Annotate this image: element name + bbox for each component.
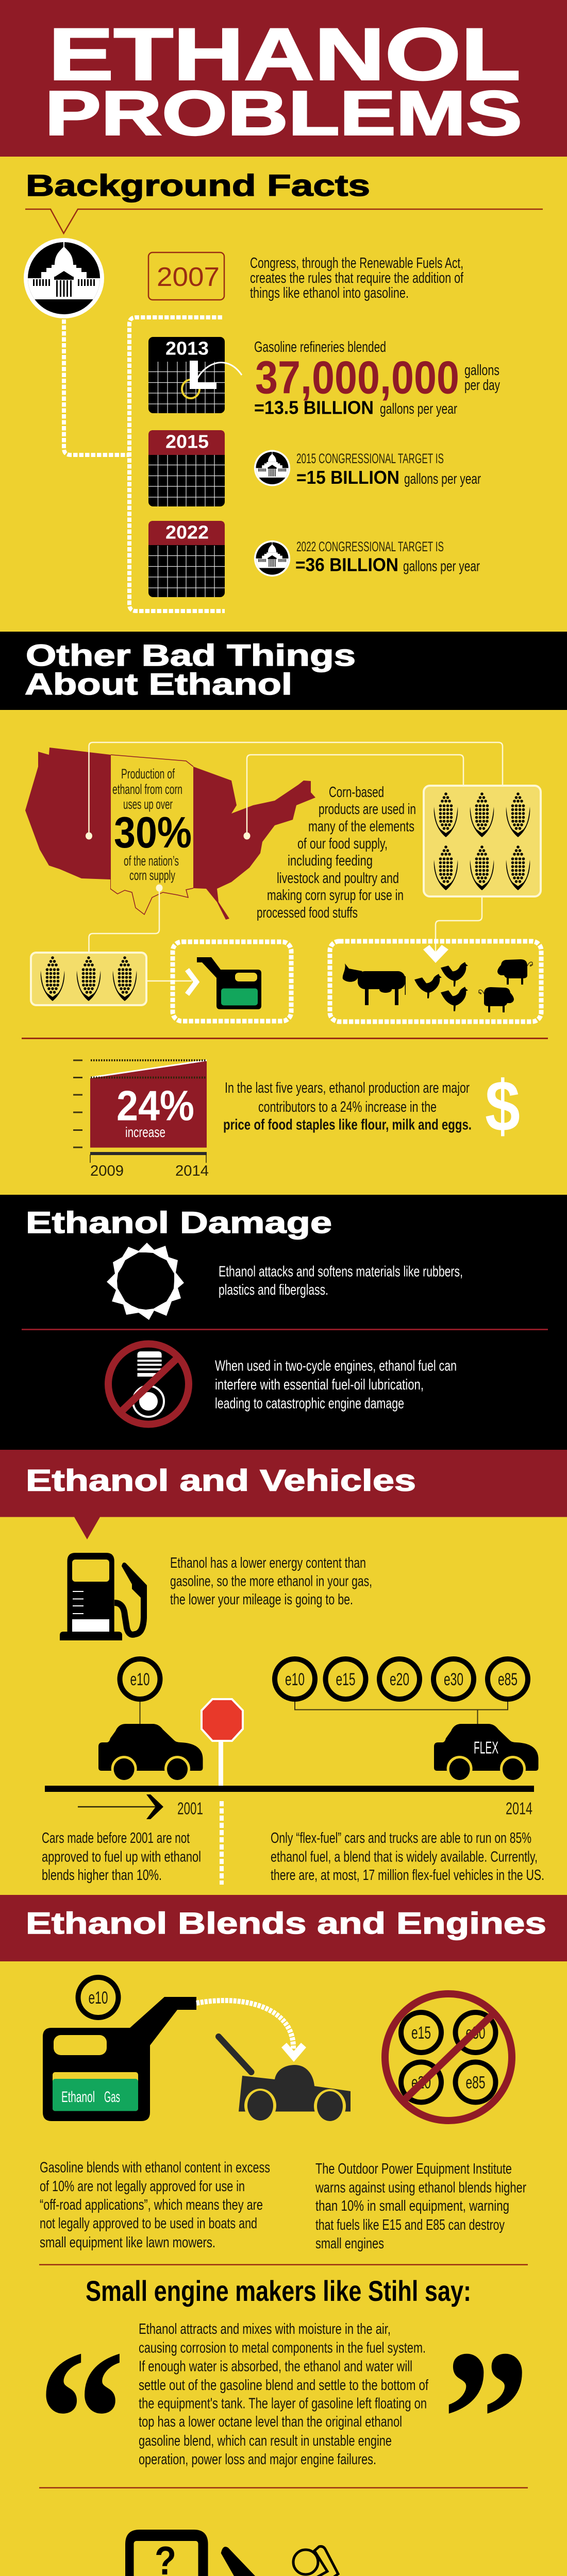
icon: car pre 2001 bbox=[98, 1724, 203, 1782]
divider bbox=[39, 2487, 528, 2488]
heading: small engine makers: Small engine makers like Stihl say: bbox=[86, 2275, 471, 2307]
blend badges: flex fuel bbox=[275, 1659, 528, 1699]
icon: prohibited blends: e20 bbox=[411, 2073, 431, 2093]
calendar 2013 bbox=[148, 337, 242, 413]
text: off road applications bbox=[40, 2160, 270, 2251]
icon: torn rubber ring bbox=[107, 1243, 184, 1320]
quote: stihl: If enough water is absorbed, the ethanol and water will bbox=[139, 2359, 412, 2375]
heading: ethanol damage: Ethanol Damage bbox=[26, 1206, 332, 1240]
heading: other bad things: Other Bad Things bbox=[26, 639, 356, 672]
text: outdoor power equipment institute: than 10% in small equipment, warning bbox=[315, 2198, 509, 2214]
quote: stihl: settle out of the gasoline blend and settle to the bottom of bbox=[139, 2377, 429, 2394]
icon: prohibited blends: e85 bbox=[466, 2073, 486, 2093]
chart: 24 percent increase: 24% bbox=[116, 1082, 194, 1129]
quote: stihl: causing corrosion to metal components in the fuel system. bbox=[139, 2340, 426, 2357]
blend badge: e10 bbox=[78, 1977, 119, 2018]
arrow: corn to fuel bbox=[187, 970, 196, 994]
blend badges: flex fuel: e30 bbox=[444, 1670, 463, 1689]
text: renewable fuels act: creates the rules that require the addition of bbox=[250, 270, 464, 286]
dashed box: livestock bbox=[330, 941, 541, 1022]
text: renewable fuels act bbox=[250, 255, 464, 301]
text: cars before 2001 bbox=[42, 1830, 201, 1884]
divider bbox=[22, 1038, 548, 1039]
icon: pigs bbox=[478, 959, 533, 1012]
icon: prohibited blends: e15 bbox=[411, 2023, 431, 2043]
text: flex fuel cars bbox=[271, 1830, 544, 1884]
icon: flex fuel car: FLEX bbox=[474, 1738, 498, 1757]
year labels: 2001 bbox=[177, 1799, 203, 1818]
text: lower energy content: Ethanol has a lower energy content than bbox=[170, 1555, 366, 1571]
stat: 37 million gallons per day: gallons bbox=[464, 362, 499, 379]
text: 30 percent of corn supply: ethanol from corn bbox=[112, 782, 182, 797]
stat: 2022 target: 2022 CONGRESSIONAL TARGET IS bbox=[296, 539, 444, 554]
icon: prohibited piston bbox=[108, 1344, 189, 1424]
chart: 24 percent increase: increase bbox=[125, 1124, 165, 1140]
panel: ethanol blends and engines bbox=[0, 1895, 567, 2576]
blend badges: flex fuel: e85 bbox=[498, 1670, 518, 1689]
heading band: blends and engines: Ethanol Blends and Engines bbox=[26, 1907, 546, 1940]
text: 30 percent of corn supply: uses up over bbox=[123, 796, 173, 812]
divider bbox=[22, 1329, 548, 1330]
text: off road applications: Gasoline blends with ethanol content in excess bbox=[40, 2160, 270, 2176]
text: lower energy content: the lower your mileage is going to be. bbox=[170, 1591, 353, 1608]
stat: 2022 target bbox=[295, 539, 480, 575]
quote: stihl: operation, power loss and major engine failures. bbox=[139, 2451, 376, 2468]
text: cars before 2001: blends higher than 10%. bbox=[42, 1867, 162, 1884]
arrow: corn to livestock bbox=[423, 945, 448, 963]
text: cars before 2001: approved to fuel up with ethanol bbox=[42, 1849, 201, 1865]
text: corn based products: many of the elements bbox=[308, 818, 414, 835]
quote: stihl: gasoline blend, which can result in unstable engine bbox=[139, 2433, 392, 2449]
quote: stihl: the equipment's tank. The layer of gasoline left floating on bbox=[139, 2396, 427, 2412]
title bbox=[45, 13, 522, 148]
icon: capitol bbox=[24, 238, 104, 318]
blend badges: flex fuel: e20 bbox=[390, 1670, 409, 1689]
text: off road applications: of 10% are not legally approved for use in bbox=[40, 2178, 245, 2195]
stat: 2015 target: gallons per year bbox=[404, 471, 481, 487]
icon: capitol small 2015 bbox=[254, 450, 290, 486]
blend badges: flex fuel: e10 bbox=[285, 1670, 305, 1689]
quote: stihl bbox=[139, 2321, 429, 2468]
panel: background facts bbox=[24, 169, 543, 611]
panel: ethanol and vehicles bbox=[0, 1450, 567, 1885]
blend badge: e10: e10 bbox=[89, 1988, 108, 2008]
stat: 37 million gallons per day: Gasoline refineries blended bbox=[254, 339, 386, 355]
icon: prohibited blends: e30 bbox=[466, 2023, 486, 2043]
icon box: three corn cobs bbox=[31, 953, 146, 1005]
text: food staples bbox=[223, 1080, 472, 1133]
heading band: ethanol and vehicles bbox=[0, 1450, 567, 1539]
icon: dollar sign: $ bbox=[485, 1065, 520, 1146]
connector lines to cars bbox=[140, 1702, 508, 1736]
heading: background facts: Background Facts bbox=[26, 169, 370, 202]
stat: 37 million gallons per day: 37,000,000 bbox=[255, 352, 459, 404]
text: attacks materials bbox=[219, 1263, 463, 1298]
title: ETHANOL bbox=[48, 13, 521, 96]
callout pointer line bbox=[25, 209, 543, 233]
quote: stihl: Ethanol attracts and mixes with moisture in the air, bbox=[139, 2321, 391, 2337]
icon: confusing fuel pump bbox=[112, 2530, 265, 2576]
text: attacks materials: plastics and fiberglass. bbox=[219, 1282, 328, 1298]
dashed box: fuel can bbox=[173, 942, 291, 1021]
text: two cycle engines: When used in two-cycle engines, ethanol fuel can bbox=[215, 1358, 457, 1375]
text: corn based products: processed food stuffs bbox=[257, 905, 358, 921]
icon: prohibited blends bbox=[385, 1994, 512, 2121]
text: lower energy content: gasoline, so the more ethanol in your gas, bbox=[170, 1573, 372, 1590]
icon: large fuel can: Ethanol bbox=[61, 2089, 95, 2106]
calendar 2015: 2015 bbox=[165, 431, 209, 452]
text: outdoor power equipment institute: that fuels like E15 and E85 can destroy bbox=[315, 2217, 505, 2233]
text: attacks materials: Ethanol attacks and softens materials like rubbers, bbox=[219, 1263, 463, 1280]
text: lower energy content bbox=[170, 1555, 372, 1608]
stat: 37 million gallons per day: =13.5 BILLION bbox=[254, 397, 374, 418]
text: renewable fuels act: things like ethanol into gasoline. bbox=[250, 285, 409, 301]
quote mark: open: “ bbox=[38, 2310, 125, 2529]
road timeline bbox=[45, 1786, 534, 1792]
text: off road applications: not legally approved to be used in boats and bbox=[40, 2215, 257, 2232]
text: corn based products: making corn syrup for use in bbox=[267, 887, 404, 904]
year labels bbox=[177, 1799, 532, 1818]
text: renewable fuels act: Congress, through the Renewable Fuels Act, bbox=[250, 255, 463, 272]
text: cars before 2001: Cars made before 2001 are not bbox=[42, 1830, 190, 1846]
chart: 24 percent increase: 2009 bbox=[90, 1163, 124, 1179]
2007 year box bbox=[148, 252, 224, 300]
icon: flex fuel car bbox=[434, 1724, 538, 1782]
stat: 2015 target bbox=[296, 451, 481, 488]
text: food staples: price of food staples like flour, milk and eggs. bbox=[223, 1117, 472, 1133]
year labels: 2014 bbox=[506, 1799, 532, 1818]
stat: 37 million gallons per day: per day bbox=[464, 377, 500, 394]
stat: 37 million gallons per day bbox=[254, 339, 500, 418]
icon: fuel can bbox=[197, 957, 261, 1009]
stat: 2022 target: =36 BILLION bbox=[295, 554, 398, 575]
text: outdoor power equipment institute: small engines bbox=[315, 2235, 384, 2252]
stat: 37 million gallons per day: gallons per year bbox=[380, 401, 457, 417]
chart: 24 percent increase: 2014 bbox=[175, 1163, 209, 1179]
calendar 2022: 2022 bbox=[165, 521, 209, 543]
dashed divider bbox=[220, 1801, 224, 1885]
stat: 2015 target: 2015 CONGRESSIONAL TARGET IS bbox=[296, 451, 444, 466]
map: united states bbox=[25, 742, 315, 927]
icon: confused person bbox=[278, 2547, 338, 2576]
text: food staples: contributors to a 24% increase in the bbox=[258, 1099, 437, 1115]
icon: large fuel can bbox=[43, 1997, 196, 2121]
text: two cycle engines: leading to catastrophic engine damage bbox=[215, 1395, 404, 1412]
text: 30 percent of corn supply: 30% bbox=[114, 808, 192, 857]
text: 30 percent of corn supply: corn supply bbox=[129, 868, 175, 883]
2007 year box: 2007 bbox=[157, 262, 220, 292]
heading: other bad things: About Ethanol bbox=[25, 668, 292, 701]
text: outdoor power equipment institute bbox=[315, 2161, 526, 2252]
arrow: before 2001 bbox=[78, 1794, 163, 1819]
quote: stihl: top has a lower octane level than the original ethanol bbox=[139, 2414, 402, 2430]
blend badges: flex fuel: e15 bbox=[336, 1670, 356, 1689]
text: 30 percent of corn supply bbox=[112, 766, 192, 883]
text: corn based products: products are used in bbox=[319, 801, 416, 818]
icon box: six corn cobs bbox=[424, 786, 541, 896]
panel: header bbox=[0, 0, 567, 157]
icon: cow bbox=[343, 963, 406, 1005]
text: corn based products: of our food supply, bbox=[297, 836, 388, 852]
text: corn based products: livestock and poultry and bbox=[277, 870, 399, 887]
text: 30 percent of corn supply: Production of bbox=[121, 766, 175, 782]
quote mark: close: ” bbox=[442, 2310, 530, 2529]
stat: 2022 target: gallons per year bbox=[403, 558, 480, 575]
arrow: dashed pour bbox=[196, 2001, 306, 2062]
dashed timeline connector bbox=[64, 317, 225, 611]
panel: food price increase bbox=[73, 1060, 520, 1179]
text: corn based products: Corn-based bbox=[329, 784, 384, 801]
calendar 2015 bbox=[148, 430, 225, 506]
text: two cycle engines bbox=[215, 1358, 457, 1412]
icon: chickens bbox=[414, 962, 468, 1011]
heading: other bad things bbox=[25, 639, 356, 701]
white connector lines bbox=[86, 742, 503, 981]
panel: other bad things bbox=[0, 632, 567, 1022]
text: off road applications: small equipment like lawn mowers. bbox=[40, 2234, 215, 2251]
heading band: ethanol and vehicles: Ethanol and Vehicles bbox=[26, 1464, 416, 1497]
heading band: blends and engines bbox=[0, 1895, 567, 1961]
text: two cycle engines: interfere with essential fuel-oil lubrication, bbox=[215, 1377, 424, 1393]
calendar 2022 bbox=[148, 521, 225, 597]
text: food staples: In the last five years, ethanol production are major bbox=[225, 1080, 470, 1096]
title: PROBLEMS bbox=[45, 78, 522, 148]
blend badge: e10 pre 2001 bbox=[120, 1659, 160, 1699]
icon: fuel pump bbox=[60, 1553, 147, 1640]
text: corn based products: including feeding bbox=[288, 853, 373, 869]
stat: 2015 target: =15 BILLION bbox=[296, 467, 399, 488]
panel: ethanol damage bbox=[0, 1195, 567, 1450]
chart: 24 percent increase bbox=[73, 1060, 209, 1179]
text: 30 percent of corn supply: of the nation’s bbox=[124, 853, 179, 869]
text: corn based products bbox=[257, 784, 416, 921]
text: off road applications: “off-road applications”, which means they are bbox=[40, 2197, 263, 2213]
blend badge: e10 pre 2001: e10 bbox=[130, 1670, 149, 1689]
icon: capitol small 2022 bbox=[254, 540, 290, 577]
icon: large fuel can: Gas bbox=[104, 2089, 120, 2106]
icon: stop sign bbox=[202, 1699, 243, 1786]
icon: lawn mower bbox=[219, 2037, 351, 2123]
calendar 2013: 2013 bbox=[165, 338, 209, 359]
divider bbox=[39, 2264, 528, 2265]
